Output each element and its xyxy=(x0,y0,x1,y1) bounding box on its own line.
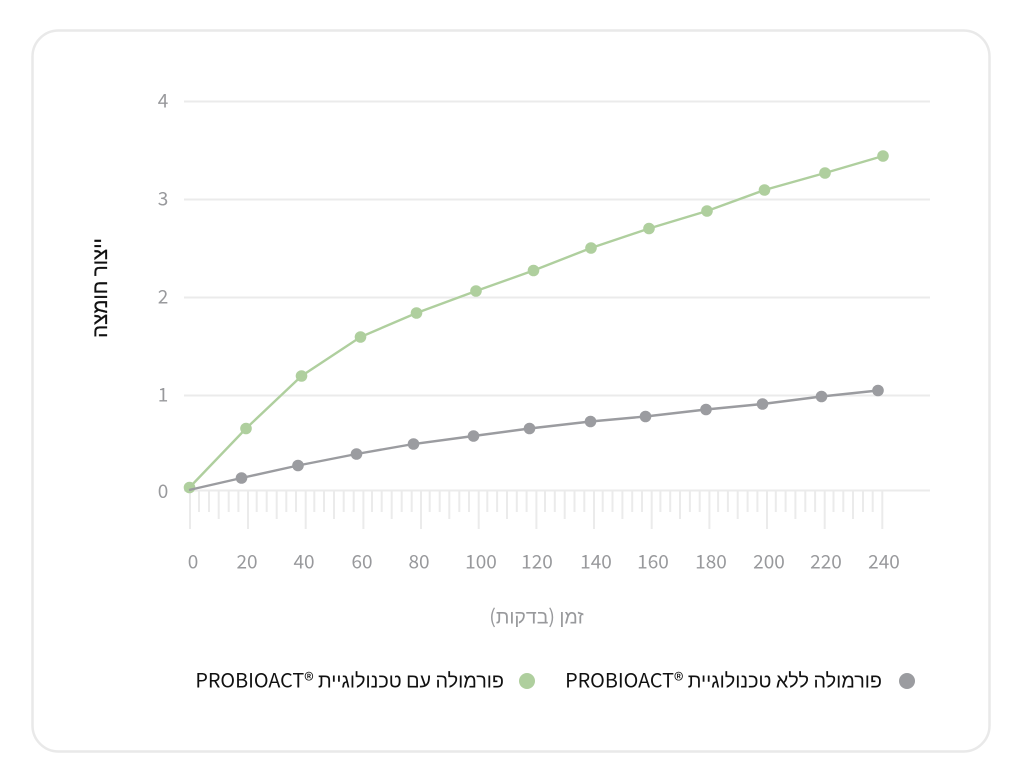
x axis labels: 120 xyxy=(521,548,553,574)
x axis labels: 80 xyxy=(408,548,430,574)
line series: without PROBIOACT technology xyxy=(189,385,884,490)
y axis labels: 2 xyxy=(158,282,168,310)
x axis labels xyxy=(188,548,900,574)
legend: without technology: פורמולה ללא טכנולוגיית ®PROBIOACT xyxy=(565,664,882,694)
x axis labels: 240 xyxy=(868,548,900,574)
x axis title: זמן (בדקות) xyxy=(489,600,584,630)
y axis labels xyxy=(158,86,168,504)
line series: with PROBIOACT technology xyxy=(184,150,889,493)
x axis labels: 140 xyxy=(580,548,612,574)
x axis labels: 220 xyxy=(810,548,842,574)
y axis labels: 3 xyxy=(158,184,168,212)
x axis labels: 180 xyxy=(695,548,727,574)
x axis with ticks xyxy=(184,490,930,529)
y axis labels: 4 xyxy=(158,86,168,114)
y axis labels: 1 xyxy=(158,380,168,408)
legend: with technology: פורמולה עם טכנולוגיית ®PROBIOACT xyxy=(195,664,504,694)
x axis labels: 200 xyxy=(753,548,785,574)
x axis labels: 40 xyxy=(293,548,315,574)
y axis title: ייצור חומצה xyxy=(83,238,113,338)
x axis labels: 0 xyxy=(188,548,198,574)
gridlines xyxy=(184,102,930,396)
x axis labels: 60 xyxy=(351,548,373,574)
x axis labels: 100 xyxy=(465,548,497,574)
y axis labels: 0 xyxy=(158,477,168,504)
x axis labels: 20 xyxy=(236,548,258,574)
x axis labels: 160 xyxy=(637,548,669,574)
